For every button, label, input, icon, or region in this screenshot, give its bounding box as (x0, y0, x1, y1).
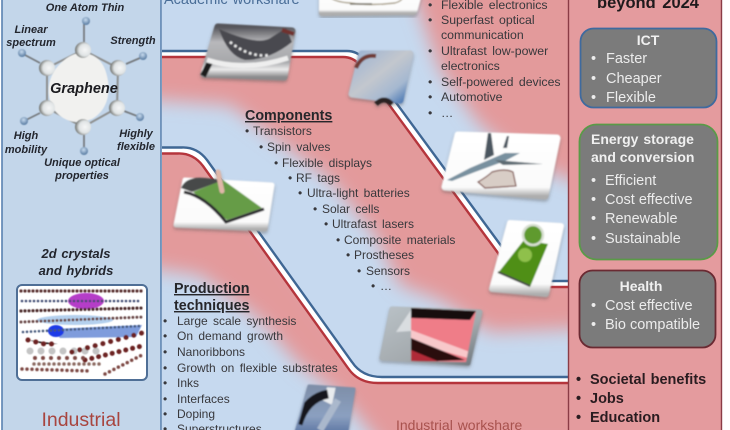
text block: applications: • (428, 90, 432, 104)
text block: components: Sensors (366, 264, 410, 278)
card: health: • (591, 298, 596, 314)
text block: applications: • (428, 75, 432, 89)
card: ICT: • (591, 51, 596, 67)
text block: components: • (371, 279, 375, 293)
text block: components (245, 108, 455, 293)
photo: green flexible display (176, 172, 272, 229)
label: unique optical properties: properties (54, 170, 109, 182)
region: production (162, 154, 568, 430)
label: graphene: Graphene (50, 81, 118, 97)
label: high mobility: mobility (5, 144, 48, 156)
card: health: Health (620, 278, 662, 294)
text block: production techniques: • (163, 407, 167, 421)
label: unique optical properties: Unique optical (44, 157, 120, 169)
text block: applications: communication (441, 28, 524, 42)
photo: red laser film (382, 305, 480, 363)
text block: components: • (324, 217, 328, 231)
text block: production techniques: Nanoribbons (177, 345, 245, 359)
text block: applications: • (428, 106, 432, 120)
text block: production techniques: Large scale synthesis (177, 314, 296, 328)
text block: production techniques: • (163, 329, 167, 343)
text block: societal benefits (576, 372, 706, 426)
label: linear spectrum: spectrum (6, 37, 56, 49)
text block: components: … (380, 279, 392, 293)
text block: applications (428, 0, 561, 120)
text block: components: • (313, 202, 317, 216)
text block: production techniques: Growth on flexible substrates (177, 361, 338, 375)
text block: societal benefits: • (576, 410, 581, 426)
text block: production techniques: • (163, 392, 167, 406)
photo: green phone (492, 223, 561, 294)
card: energy storage and conversion: Sustainable (605, 231, 681, 247)
text block: components: • (259, 140, 263, 154)
region: components (162, 58, 568, 342)
text block: applications: • (428, 44, 432, 58)
label: strength: Strength (110, 35, 156, 47)
card: energy storage and conversion: • (591, 192, 596, 208)
text block: production techniques: Inks (177, 376, 199, 390)
text block: components: Ultrafast lasers (332, 217, 414, 231)
card: health: Cost effective (605, 298, 693, 314)
text block: production techniques: Interfaces (177, 392, 230, 406)
label: high mobility: High (14, 130, 38, 142)
card: energy storage and conversion (580, 124, 718, 260)
roadmap line: upper (148, 51, 582, 287)
text block: components: Ultra-light batteries (307, 186, 410, 200)
text block: components: RF tags (296, 171, 340, 185)
text block: components: • (357, 264, 361, 278)
card: health (580, 270, 716, 348)
text block: applications: … (441, 106, 453, 120)
text block: components: • (274, 156, 278, 170)
photo: blue film (352, 54, 410, 104)
heading: components: Components (245, 108, 332, 124)
card: energy storage and conversion: • (591, 173, 596, 189)
card: energy storage and conversion: Energy storage (591, 131, 694, 147)
diagram: graphene hexagon (18, 17, 147, 155)
card: ICT: • (591, 90, 596, 106)
card: energy storage and conversion: • (591, 211, 596, 227)
card: energy storage and conversion: • (591, 231, 596, 247)
text block: components: Flexible displays (282, 156, 372, 170)
text block: components: • (336, 233, 340, 247)
text block: components: Composite materials (344, 233, 455, 247)
text block: production techniques: • (163, 361, 167, 375)
text block: societal benefits: Education (590, 410, 660, 426)
text block: components: Spin valves (267, 140, 330, 154)
photo: metallic component (203, 27, 294, 77)
text block: production techniques: • (163, 314, 167, 328)
text block: societal benefits: • (576, 372, 581, 388)
text block: components: • (346, 248, 350, 262)
text block: components: • (245, 124, 249, 138)
text block: applications: Ultrafast low-power (441, 44, 548, 58)
photo: top device tile (322, 0, 420, 13)
text block: components: Transistors (253, 124, 312, 138)
text block: components: • (298, 186, 302, 200)
card: ICT (580, 28, 716, 108)
heading: production techniques: techniques (174, 298, 250, 314)
label: highly flexible: flexible (117, 141, 155, 153)
heading: 2d crystals and hybrids: and hybrids (39, 263, 113, 278)
card: energy storage and conversion: Efficient (605, 173, 656, 189)
text block: applications: Automotive (441, 90, 503, 104)
text block: production techniques: Doping (177, 407, 215, 421)
heading: 2d crystals and hybrids: 2d crystals (42, 246, 110, 261)
text block: societal benefits: • (576, 391, 581, 407)
text block: production techniques: On demand growth (177, 329, 283, 343)
text block: applications: electronics (441, 59, 500, 73)
text block: societal benefits: Societal benefits (590, 372, 706, 388)
label: highly flexible: Highly (119, 128, 153, 140)
text block: applications: Superfast optical (441, 13, 535, 27)
region: academic workshare (410, 0, 568, 190)
card: ICT: • (591, 71, 596, 87)
label: linear spectrum: Linear (14, 24, 48, 36)
card: energy storage and conversion: Renewable (605, 211, 678, 227)
text block: production techniques (163, 281, 338, 430)
panel: materials column (2, 0, 161, 430)
text block: applications: Self-powered devices (441, 75, 561, 89)
card: health: • (591, 317, 596, 333)
text block: components: Solar cells (322, 202, 379, 216)
image: layered crystal stack (17, 285, 147, 380)
card: ICT: Faster (606, 51, 647, 67)
card: energy storage and conversion: and conversion (591, 149, 694, 165)
text block: production techniques: • (163, 345, 167, 359)
roadmap line: lower (148, 147, 582, 383)
card: health: Bio compatible (605, 317, 700, 333)
panel: central workshare area (162, 0, 568, 430)
text block: components: • (288, 171, 292, 185)
panel: beyond 2024 column (568, 0, 722, 430)
heading: production techniques: Production (174, 281, 249, 297)
card: ICT: Cheaper (606, 71, 662, 87)
text block: production techniques: • (163, 376, 167, 390)
text block: components: Prostheses (354, 248, 414, 262)
card: energy storage and conversion: Cost effective (605, 192, 693, 208)
text block: applications: • (428, 13, 432, 27)
text block: societal benefits: Jobs (590, 391, 624, 407)
card: ICT: Flexible (606, 90, 656, 106)
photo: bottom sample (295, 385, 354, 430)
photo: aeroplane and car (445, 133, 557, 196)
card: ICT: ICT (637, 32, 660, 48)
label: one atom thin: One Atom Thin (46, 2, 124, 14)
